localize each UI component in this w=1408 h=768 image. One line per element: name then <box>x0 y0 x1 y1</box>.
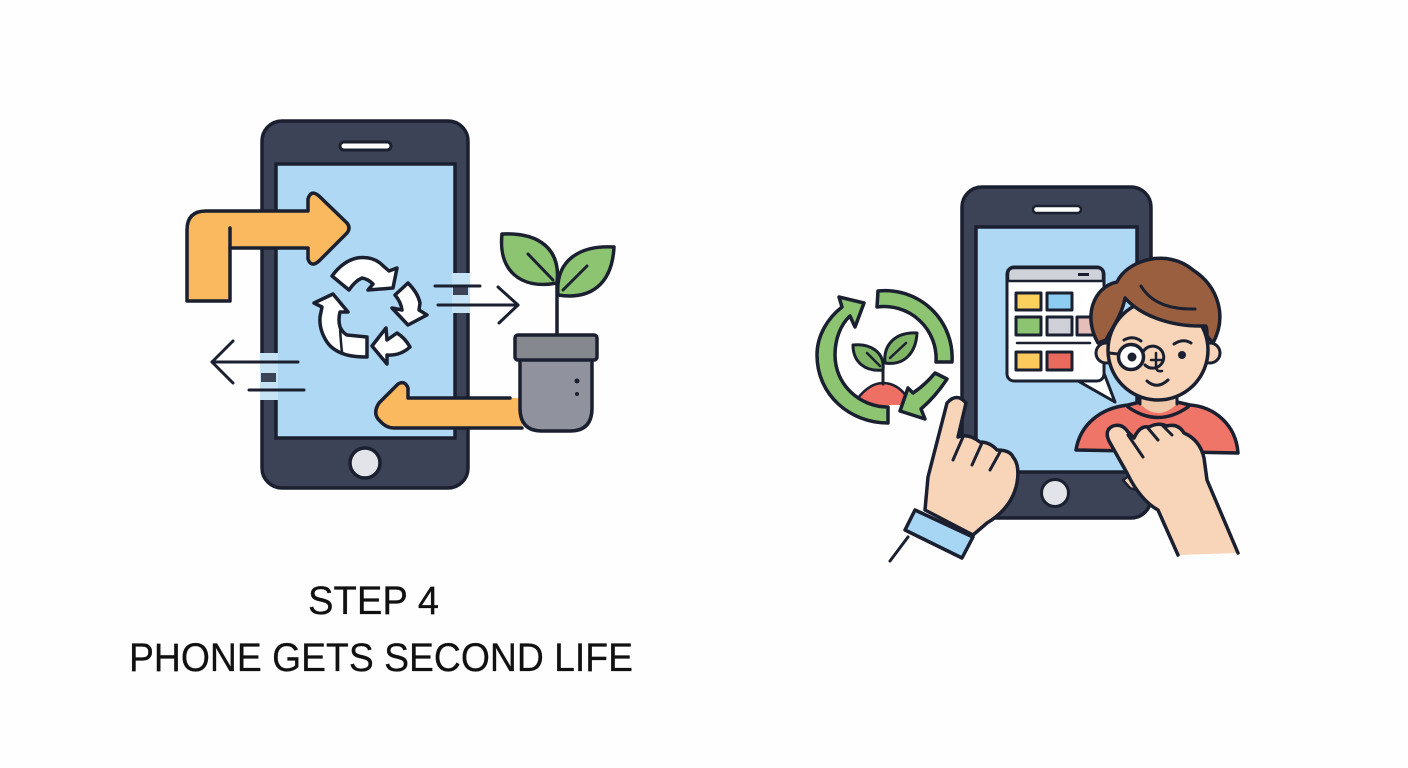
phone body <box>962 187 1151 518</box>
title <box>129 579 633 680</box>
title: STEP 4 <box>308 579 439 623</box>
person: head <box>1091 258 1220 418</box>
icon: white recycling arrows <box>314 258 427 364</box>
left hand with sleeve <box>890 398 1018 561</box>
phone body <box>262 121 468 488</box>
app window with colored tiles <box>1007 267 1115 402</box>
right hand <box>1107 424 1238 555</box>
arrow: orange return arrow from pot <box>376 383 522 428</box>
illustration: phone with recycling and plant <box>187 121 614 488</box>
light motion bands across phone edges <box>260 273 470 400</box>
arrow: outgoing line arrow left <box>212 341 304 390</box>
arrow: outgoing line arrow right <box>435 286 518 323</box>
arrow: orange bent arrow into phone <box>187 193 349 301</box>
person: shirt <box>1076 402 1238 453</box>
title: PHONE GETS SECOND LIFE <box>129 636 633 680</box>
icon: potted plant <box>502 234 614 431</box>
icon: green recycling ring with sprout <box>817 291 952 423</box>
illustration: person using phone <box>817 187 1238 561</box>
